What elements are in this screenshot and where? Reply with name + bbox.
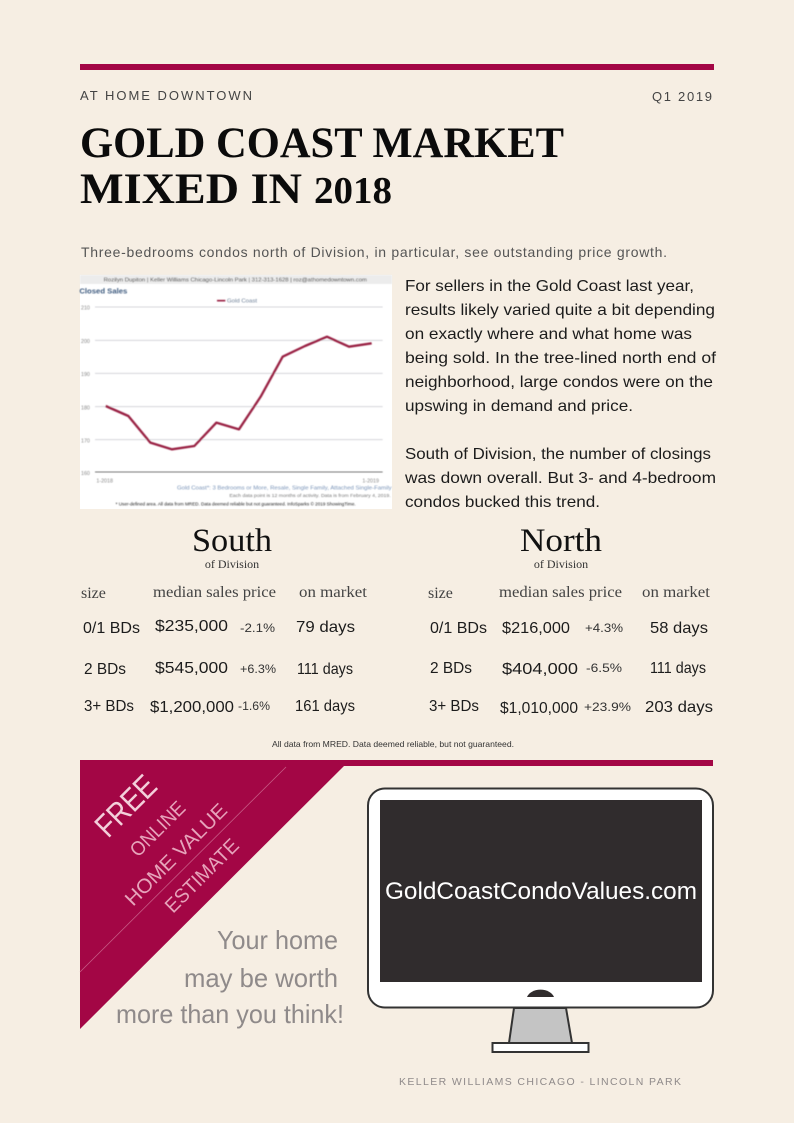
body text: neighborhood, large condos were on the [405, 374, 713, 391]
line chart: closed sales: 170 [81, 438, 90, 444]
top rule [80, 64, 714, 70]
tagline [116, 925, 344, 1029]
table: north of division: size [428, 585, 453, 602]
table: north of division: 3+ BDs [429, 698, 479, 715]
table: north of division: $404,000 [502, 661, 578, 678]
line chart: closed sales: 180 [81, 405, 90, 411]
line chart: closed sales [79, 275, 392, 509]
table: north of division: $1,010,000 [500, 700, 578, 717]
tagline: may be worth [184, 963, 338, 993]
table: south of division: 3+ BDs [84, 698, 134, 715]
banner: free online home value estimate: ESTIMATE [161, 835, 244, 918]
table: north of division: $216,000 [502, 620, 570, 637]
table: south of division: 79 days [296, 619, 355, 636]
table: north of division: median sales price [499, 584, 622, 601]
footer: KELLER WILLIAMS CHICAGO - LINCOLN PARK [399, 1076, 681, 1088]
title: 2018 [314, 170, 392, 212]
tagline: Your home [217, 925, 338, 955]
tagline: more than you think! [116, 999, 344, 1029]
table: south of division [81, 523, 368, 716]
website address: GoldCoastCondoValues.com [385, 878, 697, 905]
banner: free online home value estimate: FREE [87, 768, 164, 844]
line chart: closed sales: Closed Sales [79, 289, 127, 296]
table: south of division: median sales price [153, 584, 276, 601]
table: north of division: +23.9% [584, 700, 631, 714]
publication name: AT HOME DOWNTOWN [80, 88, 252, 103]
body text: being sold. In the tree-lined north end of [405, 350, 717, 367]
table: north of division: North [520, 523, 603, 559]
title: GOLD COAST MARKET [80, 120, 564, 167]
line chart: closed sales: 1-2019 [362, 478, 379, 484]
body text: on exactly where and what home was [405, 326, 692, 343]
banner: free online home value estimate [80, 760, 346, 1029]
banner: free online home value estimate: ONLINE [126, 797, 190, 862]
icon: desktop monitor [368, 788, 713, 1052]
line chart: closed sales: Gold Coast*: 3 Bedrooms or More, Resale, Single Family, Attached Single-Family [177, 485, 392, 491]
line chart: closed sales: 160 [81, 471, 90, 477]
table: north of division: -6.5% [586, 661, 622, 675]
table: north of division: 58 days [650, 620, 708, 637]
line chart: closed sales: 1-2018 [96, 478, 113, 484]
line chart: closed sales: 200 [81, 339, 90, 345]
table: south of division: 161 days [295, 698, 355, 715]
title [80, 120, 564, 213]
title: MIXED IN [80, 166, 302, 213]
table: south of division: South [192, 523, 273, 559]
banner: free online home value estimate: HOME VALUE [121, 800, 232, 911]
table: south of division: on market [299, 584, 368, 601]
table: south of division: +6.3% [240, 662, 276, 676]
table: north of division: 0/1 BDs [430, 620, 487, 637]
lower rule [80, 760, 713, 766]
table: north of division: 203 days [645, 699, 713, 716]
table: south of division: 0/1 BDs [83, 620, 140, 637]
line chart: closed sales: Each data point is 12 months of activity. Data is from February 4, 2019. [229, 493, 391, 498]
table: south of division: $545,000 [155, 660, 228, 677]
issue date: Q1 2019 [652, 89, 712, 104]
table: south of division: -1.6% [238, 699, 270, 713]
table: north of division [428, 523, 713, 717]
line chart: closed sales: 210 [81, 306, 90, 312]
body text: results likely varied quite a bit depending [405, 302, 715, 319]
body text: South of Division, the number of closings [405, 446, 711, 463]
table: south of division: 111 days [297, 661, 353, 678]
table: south of division: $1,200,000 [150, 699, 234, 716]
body text: For sellers in the Gold Coast last year, [405, 278, 694, 295]
table: south of division: size [81, 585, 106, 602]
body text [404, 278, 717, 511]
table: north of division: 2 BDs [430, 660, 472, 677]
subtitle: Three-bedrooms condos north of Division, in particular, see outstanding price growth. [81, 244, 667, 260]
table: south of division: of Division [205, 557, 259, 571]
table: south of division: $235,000 [155, 618, 228, 635]
table: north of division: of Division [534, 557, 588, 571]
line chart: closed sales: * User-defined area. All data from MRED. Data deemed reliable but not guaranteed. InfoSparks © 2019 ShowingTime. [116, 502, 356, 507]
data source note: All data from MRED. Data deemed reliable, but not guaranteed. [272, 739, 514, 749]
table: south of division: -2.1% [240, 621, 275, 635]
line chart: closed sales: Gold Coast [227, 299, 258, 305]
body text: was down overall. But 3- and 4-bedroom [404, 470, 716, 487]
body text: upswing in demand and price. [405, 398, 633, 415]
line chart: closed sales: Rozilyn Dupiton | Keller Williams Chicago-Lincoln Park | 312-313-1628 | roz@athomedowntown.com [104, 278, 367, 284]
table: north of division: +4.3% [585, 621, 623, 635]
table: north of division: 111 days [650, 660, 706, 677]
body text: condos bucked this trend. [405, 494, 600, 511]
line chart: closed sales: 190 [81, 372, 90, 378]
table: north of division: on market [642, 584, 711, 601]
table: south of division: 2 BDs [84, 661, 126, 678]
